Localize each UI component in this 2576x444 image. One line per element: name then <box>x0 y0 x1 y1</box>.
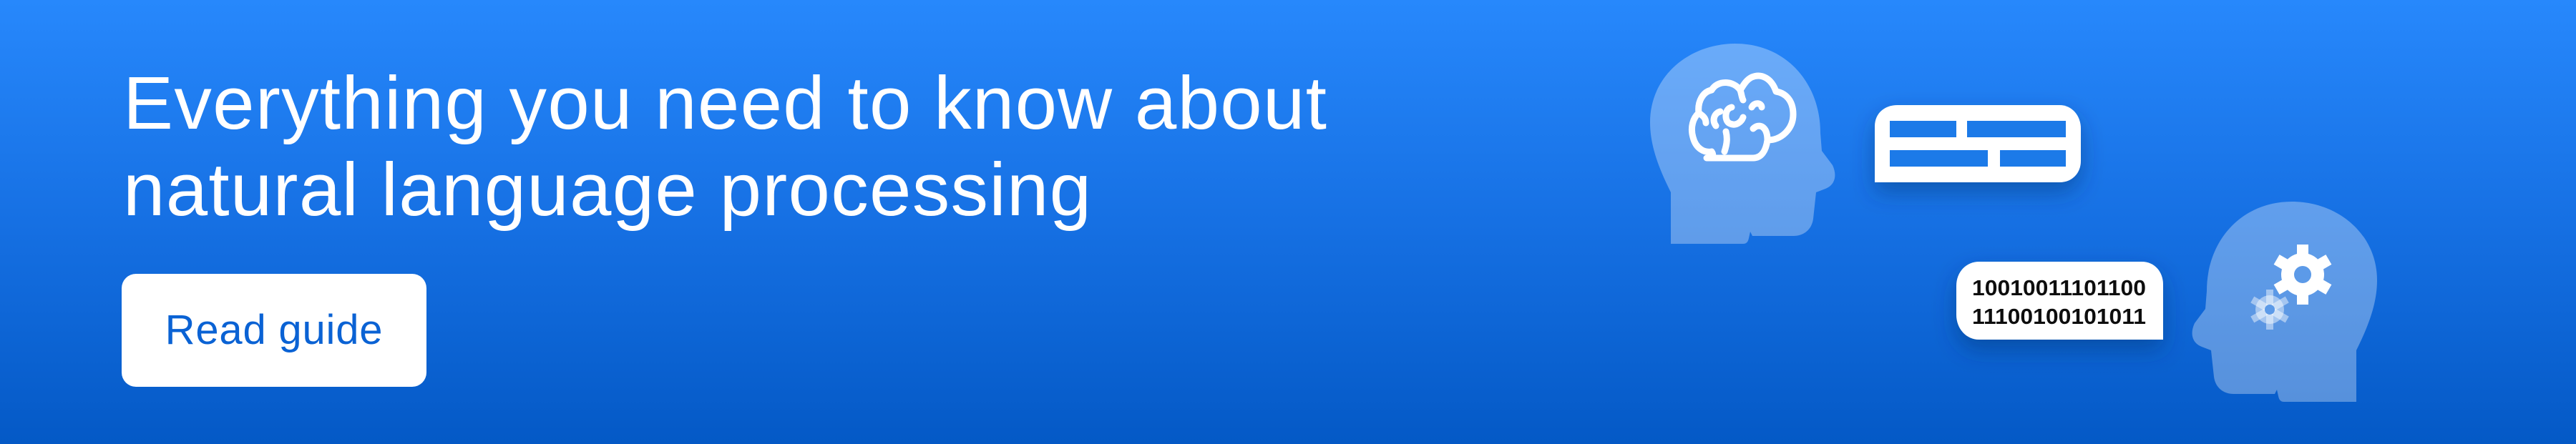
icon: brain <box>1692 76 1793 158</box>
button: read guide: Read guide <box>165 307 383 353</box>
button: read guide <box>122 274 426 387</box>
title: Everything you need to know about <box>123 61 1327 145</box>
callout: binary bubble <box>1956 262 2163 340</box>
icon: big gear <box>2274 245 2331 305</box>
title <box>123 61 1327 232</box>
icon: small gear <box>2250 290 2289 330</box>
icon: head with gears <box>2192 202 2377 402</box>
callout: text table bubble <box>1875 105 2081 182</box>
icon: head with brain <box>1650 44 1835 244</box>
title: natural language processing <box>123 148 1092 232</box>
callout: binary bubble: 10010011101100 <box>1972 275 2146 300</box>
callout: binary bubble: 11100100101011 <box>1972 304 2146 329</box>
